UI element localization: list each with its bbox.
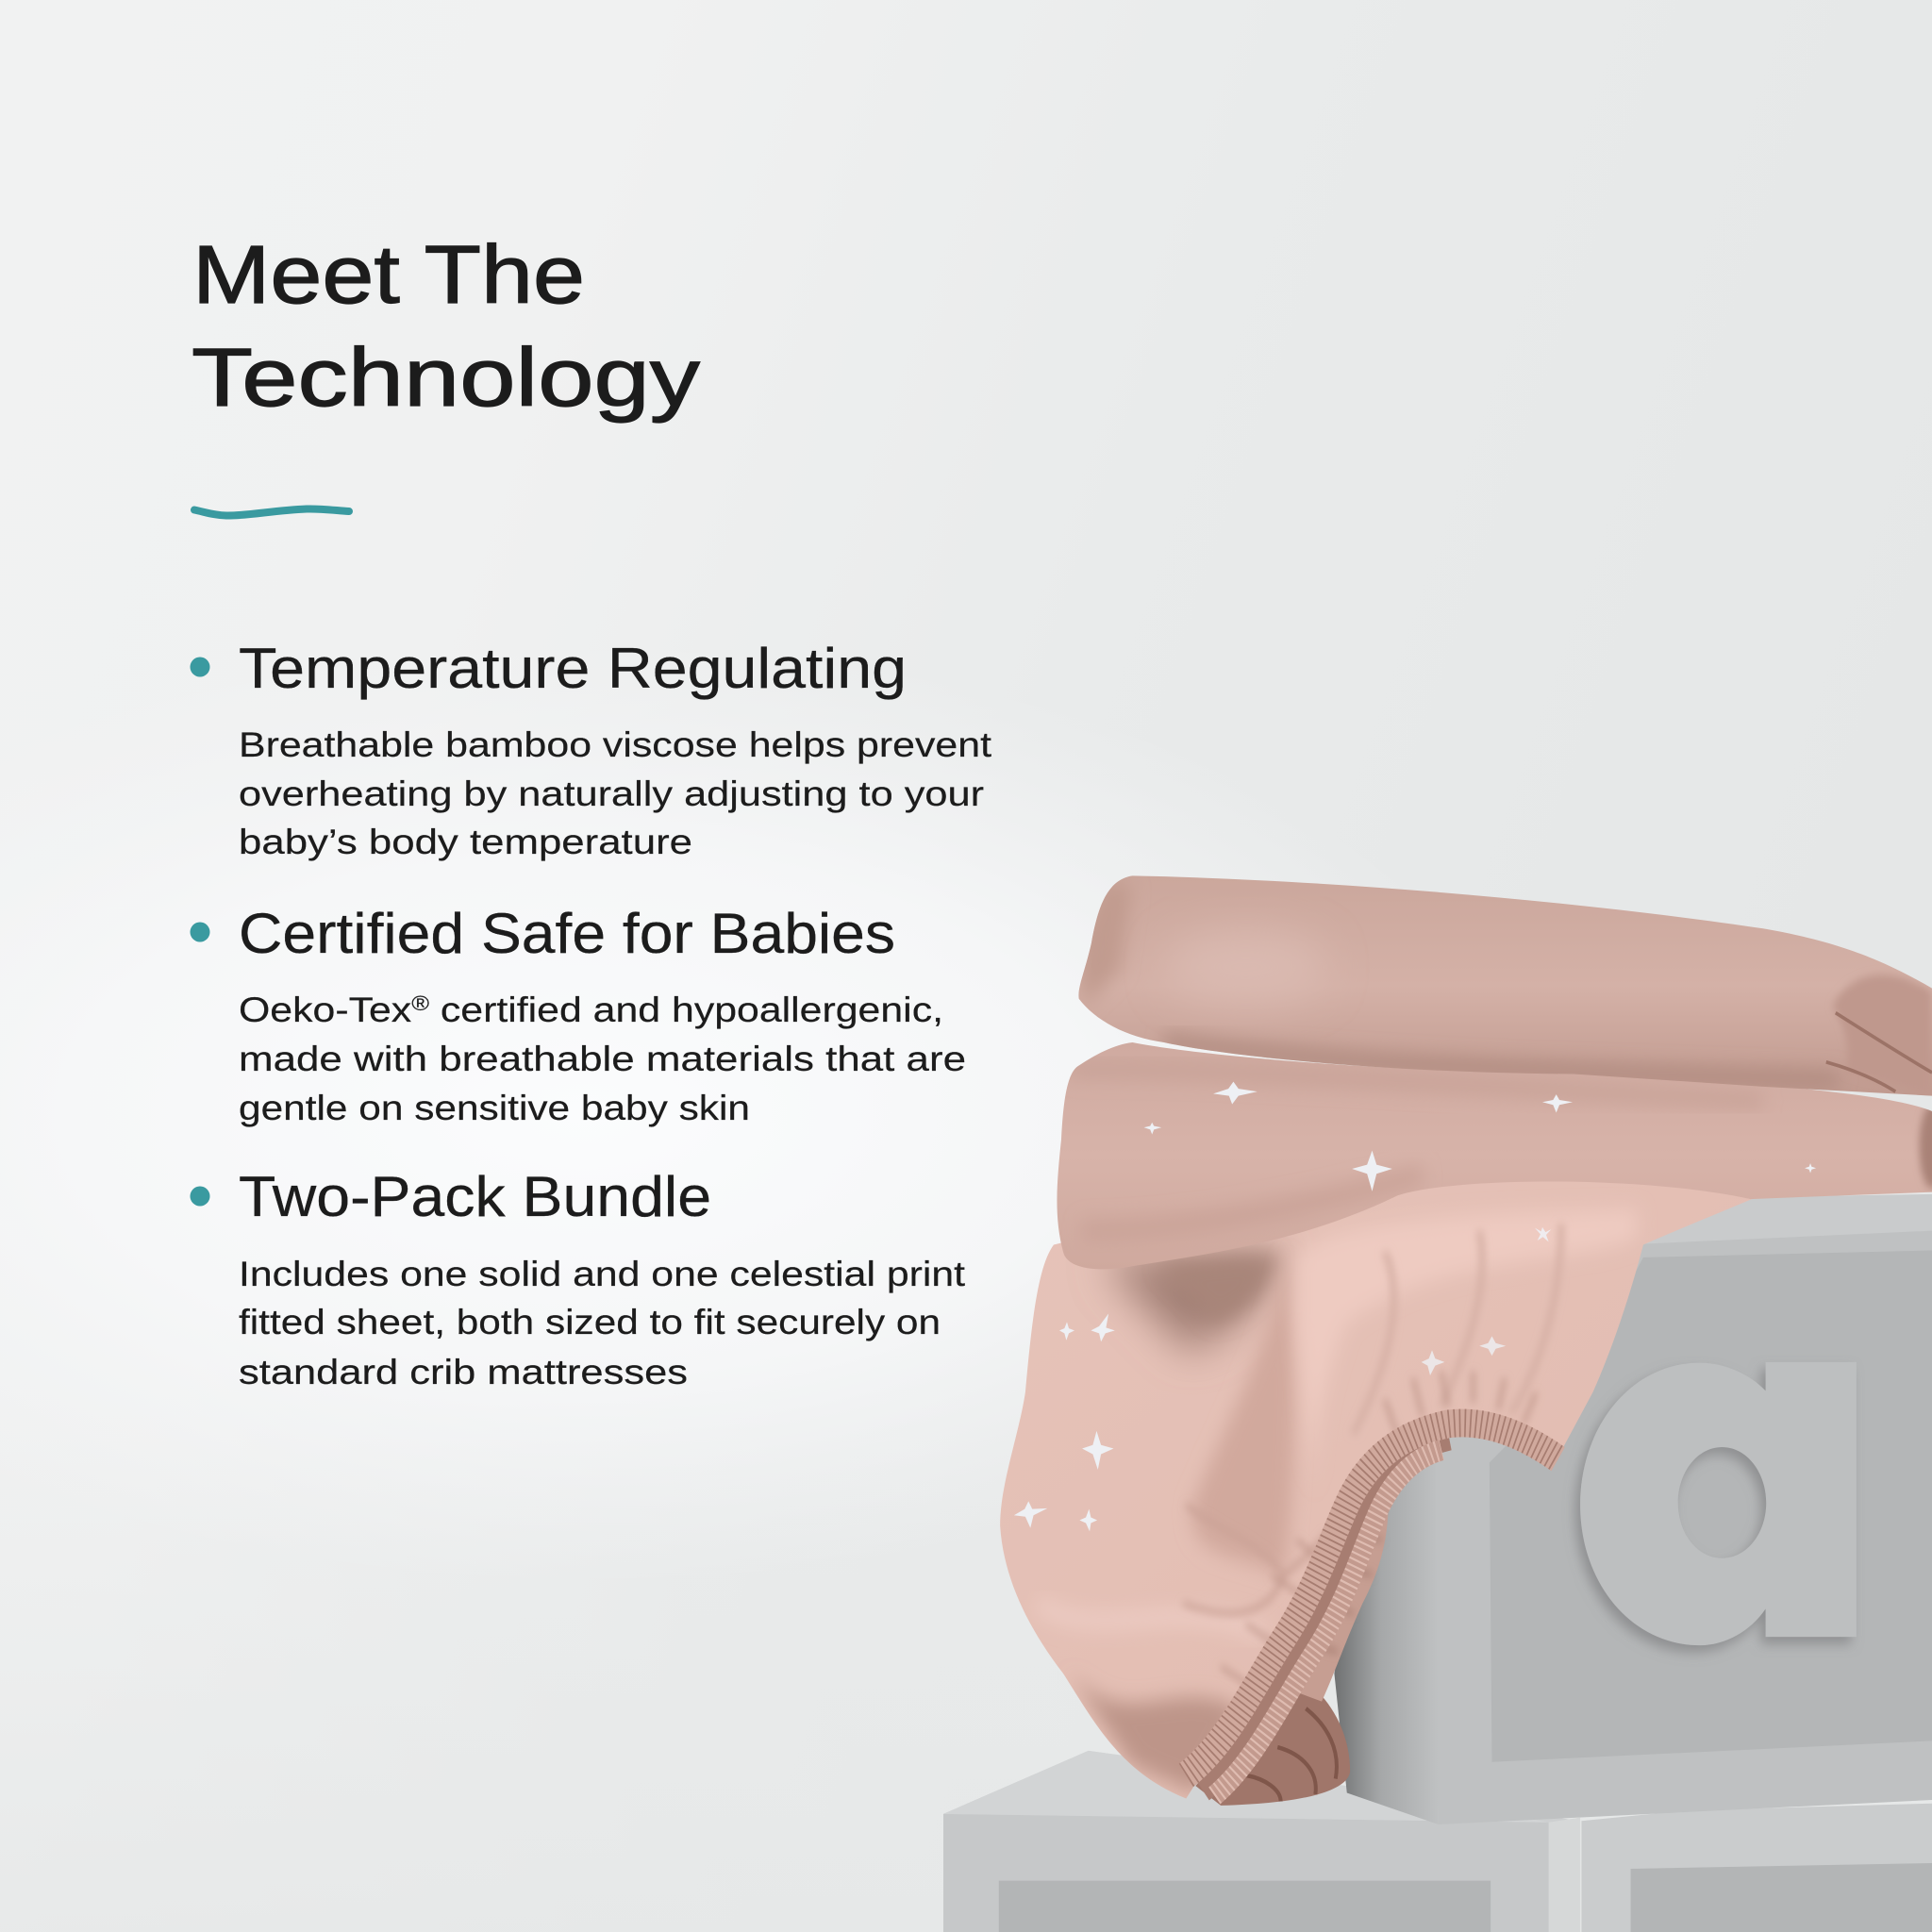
description: Breathable bamboo viscose helps prevent xyxy=(239,725,992,764)
folded solid sheet xyxy=(1078,875,1932,1096)
bullet xyxy=(191,1187,209,1206)
feature: certified safe xyxy=(191,902,966,1127)
folded print sheet xyxy=(1057,1042,1932,1269)
fitted sheet drape xyxy=(1000,1160,1757,1798)
print stars xyxy=(1014,1082,1816,1531)
block with letter a xyxy=(1334,1194,1932,1824)
description: baby’s body temperature xyxy=(239,823,692,861)
bullet xyxy=(191,657,209,677)
heading: Certified Safe for Babies xyxy=(239,902,895,965)
product photo: sheets on blocks xyxy=(943,875,1932,1932)
lower left block xyxy=(943,1751,1580,1932)
dark bunched elastic underside xyxy=(1195,1456,1389,1806)
description: Oeko-Tex xyxy=(239,991,388,1029)
description xyxy=(239,991,966,1127)
description: gentle on sensitive baby skin xyxy=(239,1089,750,1127)
description: ® xyxy=(411,991,429,1015)
description: overheating by naturally adjusting to your xyxy=(239,774,984,813)
description: made with breathable materials that are xyxy=(239,1040,966,1078)
letter a xyxy=(1580,1362,1857,1645)
title: Technology xyxy=(192,332,701,424)
elastic hem xyxy=(1186,1423,1558,1795)
description: certified and hypoallergenic, xyxy=(429,991,943,1029)
lower right block xyxy=(1581,1804,1932,1932)
description xyxy=(239,725,992,861)
bullet xyxy=(191,923,209,941)
description: Includes one solid and one celestial print xyxy=(239,1255,966,1293)
heading: Temperature Regulating xyxy=(239,637,907,700)
description: standard crib mattresses xyxy=(239,1353,688,1391)
feature: temperature regulating xyxy=(191,637,992,861)
heading: Two-Pack Bundle xyxy=(239,1165,711,1228)
title xyxy=(192,229,701,424)
feature: two-pack bundle xyxy=(191,1165,966,1391)
description xyxy=(239,1255,966,1391)
title: Meet The xyxy=(192,229,585,321)
teal squiggle underline xyxy=(194,508,349,516)
description: fitted sheet, both sized to fit securely on xyxy=(239,1303,941,1341)
